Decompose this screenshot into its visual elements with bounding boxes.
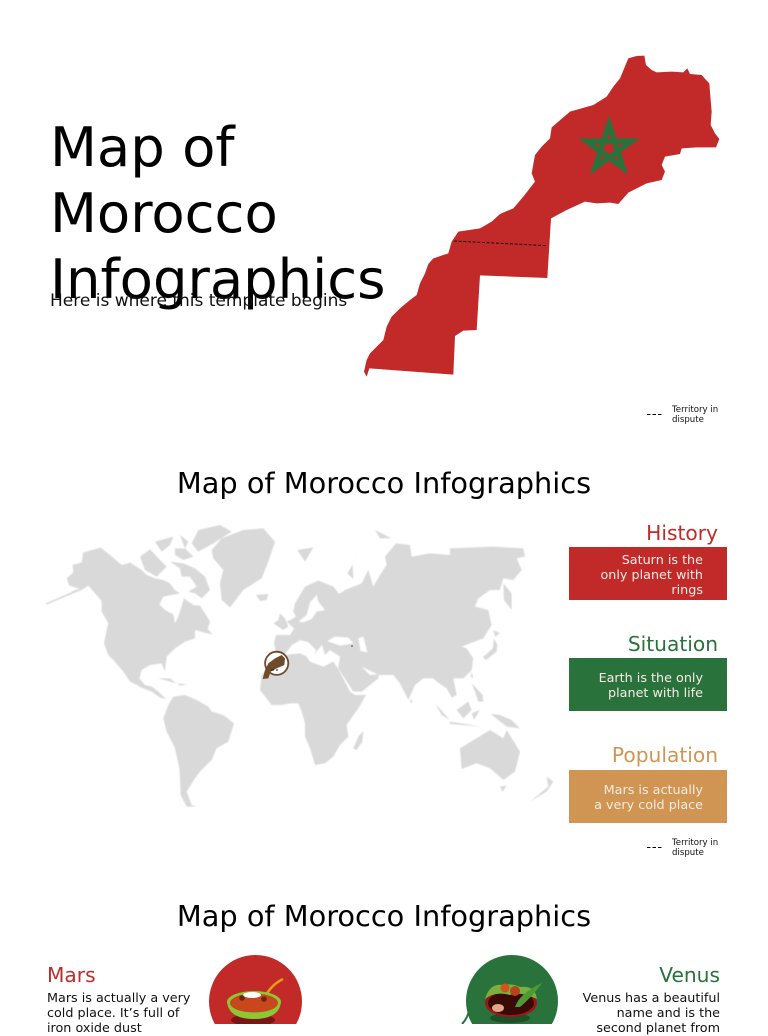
text: Venus description: second planet from [596,1021,720,1036]
label: Venus: Venus [659,963,720,987]
text: Mars description: iron oxide dust [47,1021,142,1036]
legend: territory in dispute, second: Territory in [672,838,718,848]
text: Mars description: cold place. It’s full of [47,1006,179,1021]
panel: History: rings [671,582,703,598]
legend: territory in dispute: dispute [672,415,704,425]
text: Venus description: name and is the [617,1006,720,1021]
text: Mars description: Mars is actually a very [47,991,190,1006]
icon: Morocco location marker [262,650,290,679]
title: Morocco [50,182,278,245]
label: History: History [646,521,718,545]
world map [46,524,554,807]
label: Situation: Situation [628,632,718,656]
panel: Situation: planet with life [608,686,703,701]
subtitle: Here is where this template begins [50,291,347,311]
title: Infographics [50,248,386,311]
label: Mars: Mars [47,963,96,987]
panel: Situation [569,658,726,711]
panel: Population [569,770,726,823]
panel: Population: a very cold place [594,798,703,813]
section heading: dishes: Map of Morocco Infographics [177,899,591,933]
text: Mars description [47,991,190,1036]
text: Venus description [582,991,720,1036]
title [50,116,386,311]
panel: History: only planet with [600,568,703,582]
section heading: map: Map of Morocco Infographics [177,466,591,500]
legend: territory in dispute, second [647,838,718,858]
legend: territory in dispute [647,405,718,425]
map: Morocco with star [364,56,720,376]
legend: territory in dispute, second: dispute [672,848,704,858]
panel: Situation: Earth is the only [599,671,703,686]
text: Venus description: Venus has a beautiful [583,991,720,1006]
label: Population: Population [612,743,718,767]
legend: territory in dispute: Territory in [672,405,718,415]
panel: History: Saturn is the [622,552,703,568]
icon: green circle with salad bowl [461,955,558,1024]
panel: Population: Mars is actually [604,783,703,798]
title: Map of [50,116,234,179]
icon: red circle with soup bowl [209,955,302,1024]
panel: History [569,547,726,600]
